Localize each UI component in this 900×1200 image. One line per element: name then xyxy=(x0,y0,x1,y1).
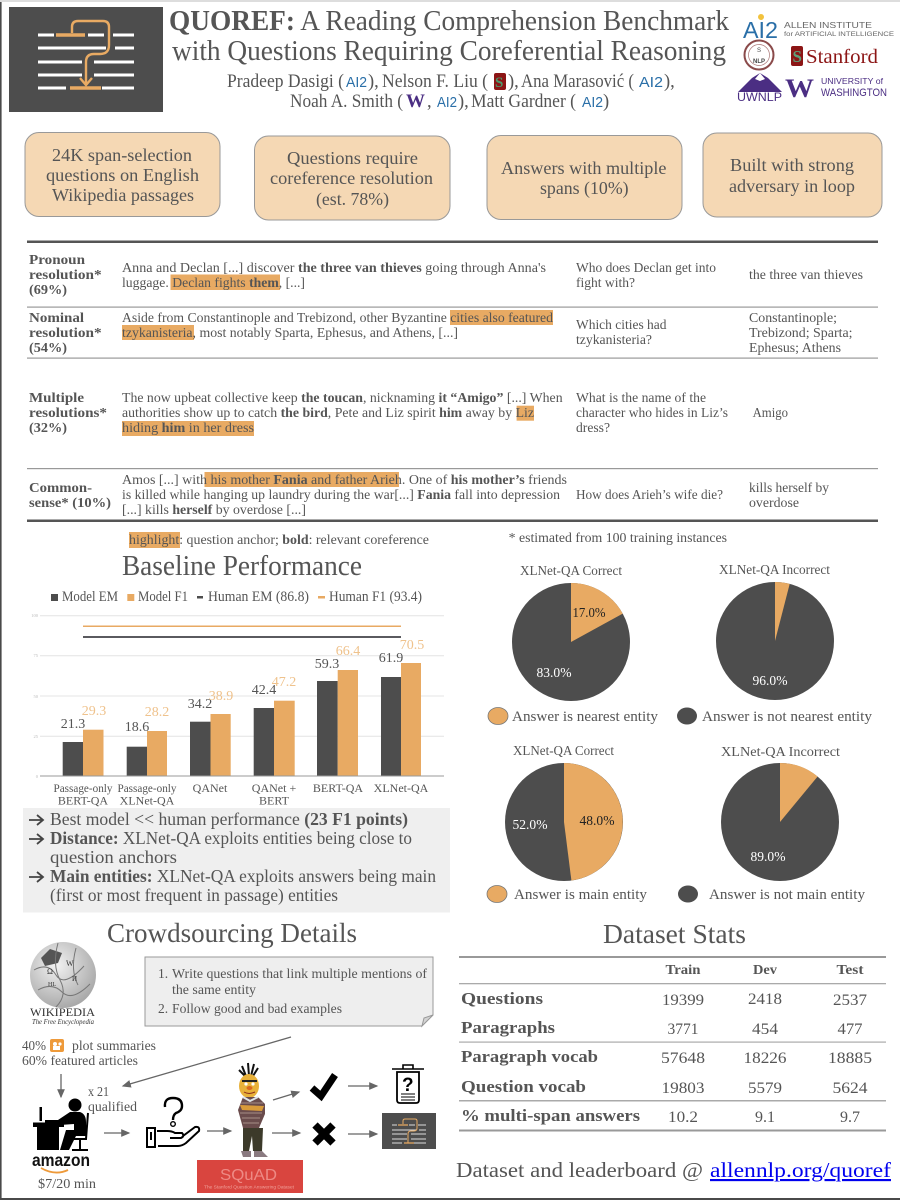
row: question vocab xyxy=(461,1077,868,1097)
category labels: Passage-only xyxy=(118,781,176,795)
row: multiple resolutions: hiding him in her dress xyxy=(122,421,254,436)
instructions note: 1. xyxy=(158,966,168,981)
row: question vocab: 5579 xyxy=(748,1080,782,1097)
row: nominal resolution: Which cities had xyxy=(576,318,666,333)
illustration: Bert adversary xyxy=(238,1063,268,1157)
row: questions: 2537 xyxy=(833,992,867,1009)
feature boxes xyxy=(25,132,882,220)
SQuAD dataset badge: SQuAD xyxy=(220,1167,277,1184)
authors: ), xyxy=(458,92,469,112)
category labels: BERT-QA xyxy=(58,794,108,808)
y axis ticks: 75 xyxy=(34,653,39,658)
authors: AI2 xyxy=(437,94,457,111)
row: common-sense: [...] kills herself by overdose [...] xyxy=(122,503,306,518)
pie charts xyxy=(487,563,872,903)
row: multiple resolutions: character who hides in Liz’s xyxy=(576,406,728,421)
bar value labels: 42.4 xyxy=(252,683,276,698)
instructions note xyxy=(145,957,433,1026)
row: nominal resolution: Ephesus; Athens xyxy=(749,341,841,356)
title: QUOREF: A Reading Comprehension Benchmark xyxy=(169,5,729,37)
row: pronoun resolution: fight with? xyxy=(576,276,635,291)
row: pronoun resolution: luggage. Declan fights them, [...] xyxy=(122,276,305,291)
arrow: worker to question xyxy=(104,1132,129,1134)
box: coreference: Questions require xyxy=(287,148,418,168)
findings callout: (first or most frequent in passage) entities xyxy=(50,885,338,905)
passage sources xyxy=(22,1039,156,1069)
icon: check xyxy=(312,1075,335,1096)
row: multi-span answers: % multi-span answers xyxy=(461,1106,641,1125)
passage sources: 60% featured articles xyxy=(22,1054,138,1069)
y axis ticks: 25 xyxy=(34,734,39,739)
row: paragraphs: 454 xyxy=(752,1021,778,1038)
row: pronoun resolution: resolution* xyxy=(29,268,102,283)
row: paragraphs: 3771 xyxy=(668,1021,698,1038)
row: common-sense: kills herself by xyxy=(749,481,829,496)
bar value labels: 70.5 xyxy=(400,638,424,653)
row: common-sense: is killed while hanging up laundry during the war[...] Fania fall into depression xyxy=(122,488,560,503)
row: questions: 19399 xyxy=(662,992,704,1009)
y axis ticks: 0 xyxy=(36,774,39,779)
table: dataset stats xyxy=(459,956,886,1132)
logo: AI2: AI2 xyxy=(743,17,778,43)
logo: AI2: ALLEN INSTITUTE xyxy=(784,20,872,30)
row: paragraphs xyxy=(461,1018,863,1038)
category labels xyxy=(54,781,429,808)
chart legend: Model F1 xyxy=(138,589,188,605)
logo: NLP seal: S xyxy=(757,48,761,54)
box: coreference xyxy=(254,136,450,220)
row: paragraph vocab: 18885 xyxy=(828,1050,872,1067)
arrow: cross to dataset xyxy=(348,1133,377,1135)
instructions note: Write questions that link multiple mentions of xyxy=(172,966,428,981)
worker pay: $7/20 min xyxy=(38,1177,96,1192)
findings callout: Main entities: XLNet-QA exploits answers being main xyxy=(50,866,436,886)
icon: wikipedia globe xyxy=(30,942,96,1026)
row: question vocab: 19803 xyxy=(662,1080,705,1097)
grid lines xyxy=(40,616,444,736)
workers qualifier: qualified xyxy=(88,1099,137,1114)
workers qualifier xyxy=(88,1084,137,1114)
authors: Nelson F. Liu ( xyxy=(382,72,488,92)
box: adversary: Built with strong xyxy=(730,155,854,175)
row: nominal resolution: Constantinople; xyxy=(749,311,837,326)
row: multiple resolutions: dress? xyxy=(576,421,610,436)
bar value labels: 61.9 xyxy=(379,651,403,666)
box: 24K span-selection: 24K span-selection xyxy=(52,145,192,165)
authors: ), xyxy=(508,72,519,92)
row: common-sense xyxy=(29,472,829,518)
row: nominal resolution: Nominal xyxy=(29,311,84,326)
coreference examples table xyxy=(27,240,878,522)
crowdsourcing flow diagram xyxy=(22,942,436,1193)
bar value labels: 29.3 xyxy=(82,704,106,719)
title xyxy=(169,5,729,67)
row: paragraphs: Paragraphs xyxy=(461,1018,556,1037)
bar value labels: 34.2 xyxy=(188,697,212,712)
box: 24K span-selection xyxy=(25,132,220,216)
logo: AI2: for ARTIFICIAL INTELLIGENCE xyxy=(784,32,894,38)
icon: QUOREF small logo xyxy=(382,1113,436,1149)
findings callout: question anchors xyxy=(50,847,177,867)
bar value labels: 28.2 xyxy=(145,705,169,720)
row: common-sense: Common- xyxy=(29,481,92,496)
heading: dataset stats: Dataset Stats xyxy=(603,919,746,949)
human reference lines xyxy=(83,626,401,638)
bars xyxy=(63,663,421,776)
bar value labels xyxy=(61,638,424,735)
pie: correct, nearest: 83.0% xyxy=(536,666,572,681)
row: nominal resolution: resolution* xyxy=(29,326,102,341)
findings callout: Best model << human performance (23 F1 points) xyxy=(50,809,408,829)
pie: incorrect, nearest: XLNet-QA Incorrect xyxy=(719,563,830,578)
row: nominal resolution: (54%) xyxy=(29,341,67,356)
icon: amazon turker at desk: amazon xyxy=(32,1150,90,1170)
table legend: highlight: question anchor; bold: relevant coreference xyxy=(129,533,429,548)
box: multiple spans xyxy=(487,136,682,220)
instructions note: 2. xyxy=(158,1001,168,1016)
heading: baseline performance: Baseline Performance xyxy=(122,550,362,582)
box: adversary xyxy=(703,133,882,217)
row: pronoun resolution: Who does Declan get into xyxy=(576,261,716,276)
pie legend: nearest entity: Answer is nearest entity xyxy=(512,709,659,725)
heading: crowdsourcing details: Crowdsourcing Details xyxy=(107,918,357,948)
icon: trash with question: ? xyxy=(402,1075,414,1096)
row: paragraph vocab xyxy=(461,1047,872,1067)
row: nominal resolution: Aside from Constantinople and Trebizond, other Byzantine cities also featured xyxy=(122,311,553,326)
category labels: BERT-QA xyxy=(313,781,363,795)
row: questions: Questions xyxy=(461,989,544,1008)
workers qualifier: x 21 xyxy=(88,1084,109,1099)
logo: Stanford: S xyxy=(792,47,802,66)
row: common-sense: overdose xyxy=(749,496,799,511)
icon: wikipedia globe: W xyxy=(66,959,74,968)
category labels: XLNet-QA xyxy=(374,781,429,795)
row: common-sense: How does Arieh’s wife die? xyxy=(576,488,723,503)
row: common-sense: Amos [...] with his mother Fania and father Arieh. One of his mother’s friends xyxy=(122,473,567,488)
findings callout xyxy=(23,808,450,912)
row: question vocab: 5624 xyxy=(832,1080,868,1097)
row: pronoun resolution: (69%) xyxy=(29,283,67,298)
arrow: question to adversary xyxy=(207,1130,231,1132)
row: paragraph vocab: 18226 xyxy=(744,1050,787,1067)
pie: correct, nearest: 17.0% xyxy=(572,606,606,621)
column headers: Test xyxy=(836,962,864,977)
box: multiple spans: spans (10%) xyxy=(540,178,629,198)
icon: amazon turker at desk xyxy=(32,1098,90,1173)
bar value labels: 66.4 xyxy=(336,644,360,659)
row: nominal resolution: tzykanisteria? xyxy=(576,333,652,348)
chart legend: Model EM xyxy=(62,589,118,605)
box: 24K span-selection: Wikipedia passages xyxy=(52,185,194,205)
footer: dataset link: Dataset and leaderboard @ xyxy=(456,1158,703,1182)
box: coreference: (est. 78%) xyxy=(316,189,389,209)
pie: incorrect, main xyxy=(721,745,840,881)
chart: baseline performance bars xyxy=(31,589,444,808)
row: multiple resolutions: Amigo xyxy=(753,406,788,421)
box: multiple spans: Answers with multiple xyxy=(501,158,667,178)
row: multi-span answers: 9.1 xyxy=(755,1109,775,1126)
authors: ), xyxy=(664,72,675,92)
row: nominal resolution xyxy=(29,310,852,356)
authors: Ana Marasović ( xyxy=(521,72,634,92)
authors: ) xyxy=(603,92,609,112)
icon: question in hand xyxy=(147,1098,199,1147)
row: multiple resolutions: resolutions* xyxy=(29,406,107,421)
chart legend: Human EM (86.8) xyxy=(208,589,309,605)
category labels: BERT xyxy=(259,794,290,808)
row: multi-span answers: 9.7 xyxy=(840,1109,860,1126)
bar value labels: 59.3 xyxy=(315,657,339,672)
y axis ticks: 50 xyxy=(34,694,39,699)
row: multiple resolutions: The now upbeat collective keep the toucan, nicknaming it “Amigo” [...] When xyxy=(122,391,563,406)
footer: dataset link: allennlp.org/quoref xyxy=(710,1158,892,1182)
arrow: sources to workers xyxy=(60,1074,62,1097)
authors: ), xyxy=(368,72,379,92)
row: nominal resolution: tzykanisteria, most notably Sparta, Ephesus, and Athens, [...] xyxy=(122,326,458,341)
icon: wikipedia globe: The Free Encyclopedia xyxy=(32,1018,94,1026)
pie: correct, nearest xyxy=(512,564,630,701)
row: common-sense: sense* (10%) xyxy=(29,496,111,511)
logo: NLP seal xyxy=(744,40,774,70)
bar value labels: 18.6 xyxy=(125,720,149,735)
row: question vocab: Question vocab xyxy=(461,1077,586,1096)
row: paragraph vocab: 57648 xyxy=(661,1050,705,1067)
arrow: instructions to workers xyxy=(123,1037,291,1086)
authors: Matt Gardner ( xyxy=(471,92,576,112)
SQuAD dataset badge xyxy=(197,1160,303,1193)
logo: University of Washington xyxy=(785,74,887,103)
box: adversary: adversary in loop xyxy=(729,176,855,196)
icon: wikipedia globe: WIKIPEDIA xyxy=(30,1007,96,1019)
footer: dataset link xyxy=(456,1158,892,1182)
SQuAD dataset badge: The Stanford Question Answering Dataset xyxy=(204,1184,295,1190)
arrow: Bert to cross xyxy=(272,1132,300,1134)
institution logos xyxy=(737,14,894,104)
y axis ticks: 100 xyxy=(31,613,39,618)
pie legend: main entity: Answer is not main entity xyxy=(709,887,865,903)
authors: AI2 xyxy=(639,74,663,91)
row: pronoun resolution: the three van thieves xyxy=(749,268,863,283)
bar value labels: 21.3 xyxy=(61,717,85,732)
pie: correct, main: 52.0% xyxy=(512,818,548,833)
row: multiple resolutions: (32%) xyxy=(29,421,67,436)
authors: Noah A. Smith ( xyxy=(290,92,403,112)
pie legend: main entity xyxy=(487,886,865,903)
instructions note: the same entity xyxy=(172,982,256,997)
row: questions xyxy=(461,989,867,1009)
pie legend: nearest entity xyxy=(488,708,872,725)
authors: Pradeep Dasigi ( xyxy=(227,72,344,92)
arrow: check to trash xyxy=(348,1085,377,1087)
category labels: Passage-only xyxy=(54,781,112,795)
column headers xyxy=(666,962,864,977)
arrow: Bert to check xyxy=(273,1092,299,1100)
pie legend: main entity: Answer is main entity xyxy=(514,887,647,903)
icon: cross xyxy=(315,1125,333,1143)
column headers: Dev xyxy=(753,962,777,977)
logo: UWNLP: UWNLP xyxy=(737,92,782,104)
pie: incorrect, main: 89.0% xyxy=(750,850,786,865)
row: paragraph vocab: Paragraph vocab xyxy=(461,1047,598,1066)
logo: University of Washington: W xyxy=(785,74,814,103)
authors: AI2 xyxy=(346,74,367,91)
icon: wikipedia globe: Ω xyxy=(47,967,53,976)
authors: , xyxy=(427,92,432,112)
logo: Stanford: Stanford xyxy=(806,46,878,68)
pie: correct, main: XLNet-QA Correct xyxy=(513,744,614,759)
pie: correct, nearest: XLNet-QA Correct xyxy=(520,564,622,579)
category labels: QANet + xyxy=(252,781,296,795)
chart legend xyxy=(51,589,422,605)
icon: trash with question xyxy=(392,1065,424,1103)
logo: University of Washington: WASHINGTON xyxy=(821,87,887,99)
bar value labels: 38.9 xyxy=(209,689,233,704)
pie: incorrect, main: XLNet-QA Incorrect xyxy=(721,745,840,760)
column headers: Train xyxy=(666,962,701,977)
chart legend: Human F1 (93.4) xyxy=(329,589,422,605)
pie: correct, main: 48.0% xyxy=(580,814,615,829)
row: multiple resolutions: Multiple xyxy=(29,391,84,406)
instructions note: Follow good and bad examples xyxy=(172,1001,342,1016)
icon: wikipedia globe: HL xyxy=(48,982,56,988)
authors xyxy=(227,72,675,112)
findings callout: Distance: XLNet-QA exploits entities being close to xyxy=(50,828,412,848)
passage sources: 40% xyxy=(22,1039,46,1054)
category labels: QANet xyxy=(193,781,228,795)
pie: incorrect, nearest xyxy=(716,563,834,700)
bar value labels: 47.2 xyxy=(272,675,296,690)
pie: correct, main xyxy=(505,744,623,881)
logo: UWNLP xyxy=(737,73,782,104)
logo: University of Washington: UNIVERSITY of xyxy=(821,76,884,86)
row: multi-span answers xyxy=(461,1106,860,1126)
authors: S xyxy=(495,75,503,91)
authors: AI2 xyxy=(582,94,603,111)
category labels: XLNet-QA xyxy=(120,794,175,808)
box: 24K span-selection: questions on English xyxy=(46,165,199,185)
header logo: question arrow over text lines xyxy=(9,7,163,112)
row: multiple resolutions xyxy=(29,391,788,436)
row: paragraphs: 477 xyxy=(838,1021,863,1038)
row: questions: 2418 xyxy=(748,991,782,1008)
table footnote: * estimated from 100 training instances xyxy=(509,531,727,546)
row: multi-span answers: 10.2 xyxy=(668,1109,698,1126)
pie: incorrect, nearest: 96.0% xyxy=(752,674,788,689)
row: pronoun resolution: Pronoun xyxy=(29,253,85,268)
box: coreference: coreference resolution xyxy=(270,168,433,188)
row: pronoun resolution: Anna and Declan [...] discover the three van thieves going through Anna's xyxy=(122,261,546,276)
y axis ticks xyxy=(31,613,39,779)
pie legend: nearest entity: Answer is not nearest entity xyxy=(702,709,872,725)
authors: W xyxy=(406,91,425,112)
logo: AI2 xyxy=(743,14,894,43)
passage sources: plot summaries xyxy=(72,1039,156,1054)
title: with Questions Requiring Coreferential Reasoning xyxy=(172,35,726,67)
row: nominal resolution: Trebizond; Sparta; xyxy=(749,326,852,341)
logo: NLP seal: NLP xyxy=(753,59,765,65)
row: multiple resolutions: What is the name of the xyxy=(576,391,706,406)
row: pronoun resolution xyxy=(29,253,863,298)
row: multiple resolutions: authorities show up to catch the bird, Pete and Liz spirit him away by Liz xyxy=(122,406,534,421)
icon: wikipedia globe: И xyxy=(72,975,77,983)
